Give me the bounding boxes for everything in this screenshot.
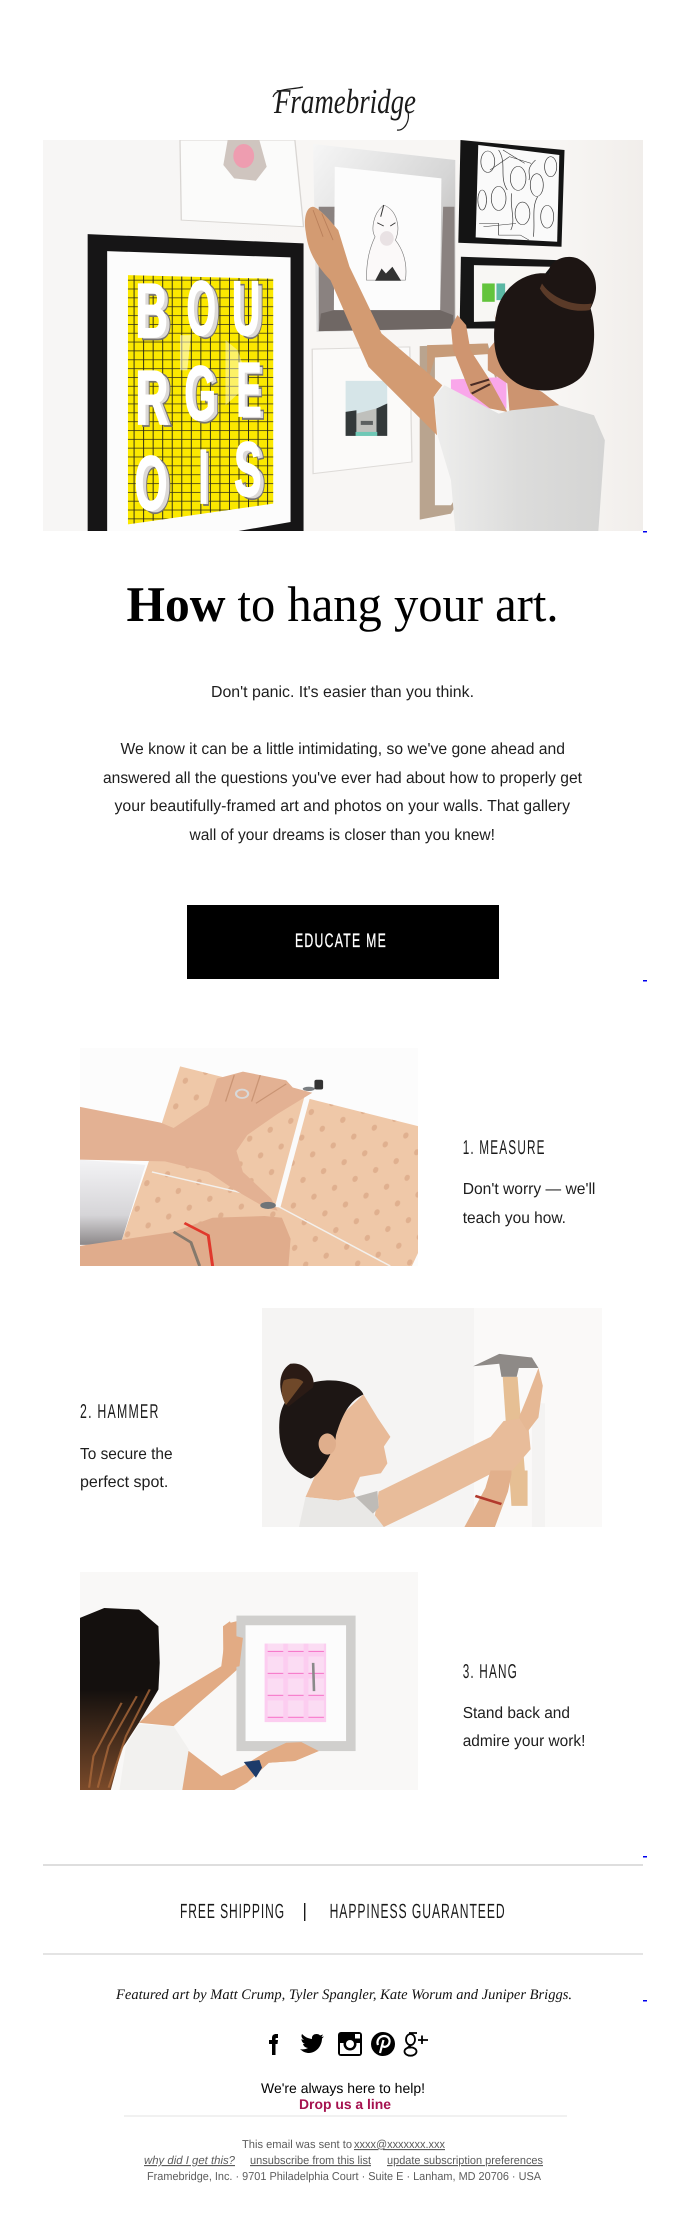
icon: facebook xyxy=(269,2034,278,2055)
link dash above rule xyxy=(643,1856,647,1858)
OIS letters: O xyxy=(134,440,167,526)
big black frame: S xyxy=(239,429,266,515)
step 3 text: admire your work! xyxy=(463,1733,585,1750)
link dash under button xyxy=(643,980,647,982)
step 2 text xyxy=(80,1401,173,1491)
RGE letters: R xyxy=(140,357,173,443)
OIS letters xyxy=(134,426,266,529)
black frame with line-art faces xyxy=(458,140,565,247)
black frame with green art xyxy=(460,257,557,328)
heading: How to hang your art: How xyxy=(126,576,226,632)
mirrored silver frame xyxy=(313,144,455,332)
logo: Framebridge xyxy=(273,82,416,130)
step 2 text: To secure the xyxy=(80,1446,173,1463)
step 3 text xyxy=(463,1661,585,1750)
footer rule xyxy=(124,2116,567,2117)
intro text: wall of your dreams is closer than you knew! xyxy=(189,827,495,844)
step 2 text: 2. HAMMER xyxy=(80,1401,160,1423)
footer text xyxy=(144,2139,543,2183)
icon: google plus xyxy=(404,2033,428,2056)
BOU letters: O xyxy=(186,265,216,351)
big black frame: U xyxy=(236,268,265,354)
icon: pinterest xyxy=(371,2032,395,2056)
intro text xyxy=(103,684,583,844)
button: EDUCATE ME xyxy=(187,905,499,979)
photo: woman hammering a nail xyxy=(262,1308,545,1527)
RGE letters: G xyxy=(189,353,220,439)
footer text: This email was sent to xyxy=(242,2139,352,2151)
RGE letters: G xyxy=(184,350,216,436)
icon: instagram xyxy=(338,2032,362,2056)
credit line: Featured art by Matt Crump, Tyler Spangler, Kate Worum and Juniper Briggs. xyxy=(115,1987,572,2003)
OIS letters: O xyxy=(139,443,172,529)
help text: We're always here to help! xyxy=(261,2080,425,2096)
button: EDUCATE ME: EDUCATE ME xyxy=(295,930,387,952)
BOU letters: O xyxy=(191,268,220,354)
step 1 text: teach you how. xyxy=(463,1210,566,1227)
wooden frame with pink art xyxy=(420,344,507,520)
big black frame: S xyxy=(234,426,261,512)
shipping strip: FREE SHIPPING xyxy=(180,1900,285,1923)
shipping strip xyxy=(43,1864,643,1954)
step 3 text: 3. HANG xyxy=(463,1661,518,1683)
raised arm xyxy=(305,207,442,435)
intro text: Don't panic. It's easier than you think. xyxy=(211,684,474,701)
logo: Framebridge: Framebridge xyxy=(273,82,416,121)
woman from behind xyxy=(305,207,605,531)
second arm xyxy=(451,315,507,412)
step 3 text: Stand back and xyxy=(463,1705,570,1722)
OIS letters: I xyxy=(201,436,211,521)
BOU letters: B xyxy=(135,267,168,353)
big black frame: E xyxy=(236,347,261,433)
top centre white frame xyxy=(180,140,304,227)
footer text: unsubscribe from this list xyxy=(250,2155,372,2167)
intro text: We know it can be a little intimidating, so we've gone ahead and xyxy=(120,741,565,758)
bracelets xyxy=(470,380,490,394)
shipping strip: HAPPINESS GUARANTEED xyxy=(330,1900,506,1923)
yellow grid art xyxy=(128,275,273,524)
RGE letters xyxy=(135,347,265,443)
footer text: update subscription preferences xyxy=(387,2155,543,2167)
big black frame: U xyxy=(232,265,260,351)
hair xyxy=(494,257,596,390)
OIS letters: I xyxy=(199,434,208,519)
link dash under hero xyxy=(643,531,647,532)
heading: How to hang your art: to hang your art. xyxy=(238,576,558,632)
photo: woman hanging a framed print xyxy=(80,1608,356,1790)
big black frame: E xyxy=(240,350,265,435)
step 1 text xyxy=(463,1137,595,1227)
big black frame xyxy=(88,234,304,531)
help text xyxy=(261,2080,425,2112)
intro text: your beautifully-framed art and photos on your walls. That gallery xyxy=(114,798,570,815)
BOU letters xyxy=(135,265,265,356)
footer text: Framebridge, Inc. · 9701 Philadelphia Court · Suite E · Lanham, MD 20706 · USA xyxy=(147,2171,541,2183)
help text: Drop us a line xyxy=(299,2096,391,2112)
BOU letters: B xyxy=(140,270,172,356)
neck and face edge xyxy=(488,313,559,412)
footer text: xxxx@xxxxxxx.xxx xyxy=(354,2139,445,2151)
RGE letters: R xyxy=(135,355,168,441)
photo: measuring the frame back xyxy=(80,1066,418,1266)
white frame with building photo xyxy=(312,347,412,474)
step 2 text: perfect spot. xyxy=(80,1474,168,1491)
step 1 text: Don't worry — we'll xyxy=(463,1181,595,1198)
intro text: answered all the questions you've ever had about how to properly get xyxy=(103,770,583,787)
icon: twitter xyxy=(300,2034,324,2053)
step 1 text: 1. MEASURE xyxy=(463,1137,546,1159)
t-shirt xyxy=(434,385,605,531)
link dash by credit line xyxy=(643,2000,647,2002)
hero photo: woman hanging a gallery wall xyxy=(43,140,643,531)
social icons xyxy=(269,2032,428,2056)
footer text: why did I get this? xyxy=(144,2155,236,2167)
